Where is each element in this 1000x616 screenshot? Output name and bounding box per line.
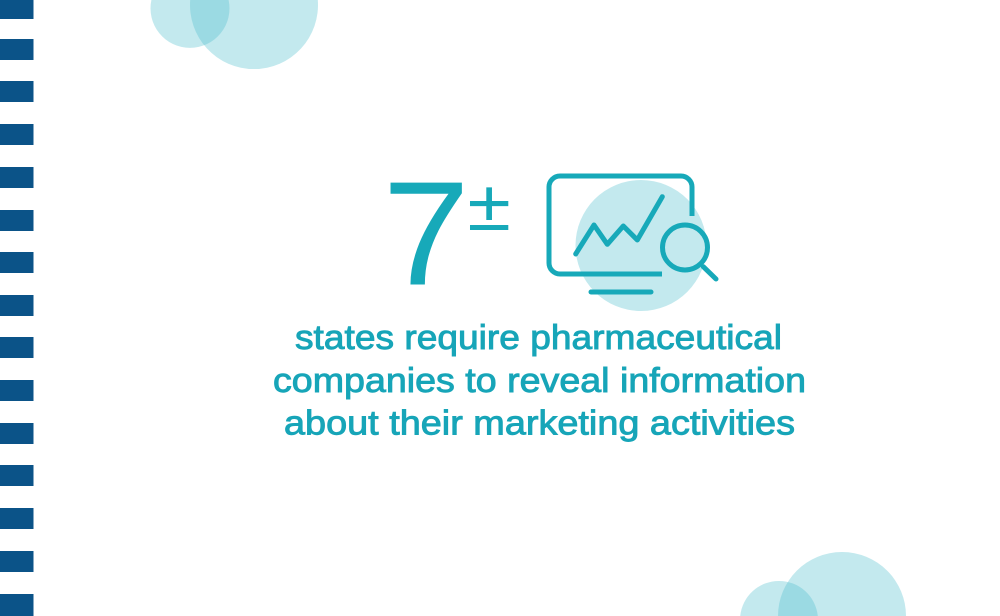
icon: monitor with chart and magnifier	[549, 176, 716, 311]
statistic: 7 plus-minus	[382, 152, 511, 317]
caption line 1: states require pharmaceutical	[295, 319, 782, 357]
numeral 7: 7	[382, 152, 470, 317]
icon background circle	[576, 180, 706, 311]
plus-minus sign: ±	[468, 166, 511, 245]
monitor stand	[591, 290, 651, 294]
caption text	[273, 319, 806, 442]
decorative circles: top	[150, 0, 318, 69]
caption line 2: companies to reveal information	[273, 362, 806, 400]
decorative circles: bottom right	[740, 552, 906, 616]
caption line 3: about their marketing activities	[284, 404, 795, 442]
magnifying glass	[662, 225, 716, 279]
line chart	[576, 197, 662, 254]
monitor outline	[549, 176, 692, 274]
left edge dashed stripe	[0, 0, 34, 616]
